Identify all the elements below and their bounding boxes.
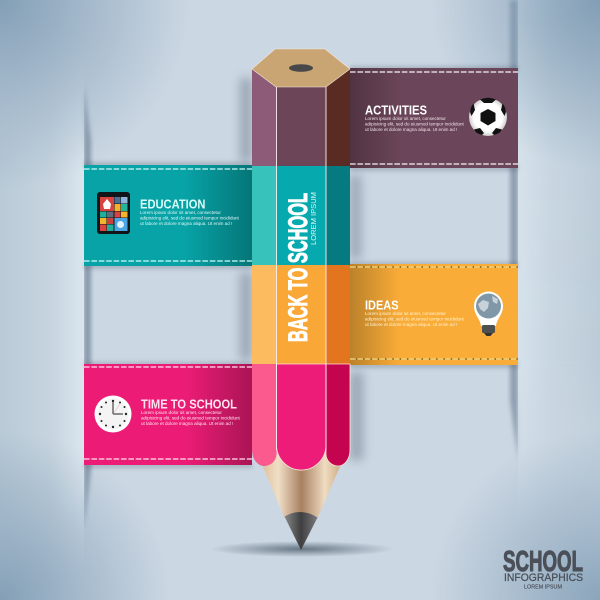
text block: activities: adipisicing elit, sed do eiusmod tempor incididunt xyxy=(365,121,465,126)
pencil xyxy=(252,49,350,550)
text block: education: ut labore et dolore magna aliqua. Ut enim ad ! xyxy=(140,221,232,226)
pencil orange section xyxy=(252,265,350,364)
text block: ideas: ut labore et dolore magna aliqua. Ut enim ad ! xyxy=(365,322,457,327)
pencil wood cone xyxy=(258,455,345,518)
heading: education: EDUCATION xyxy=(140,198,206,212)
pencil pink section xyxy=(252,364,350,470)
text block: education: Lorem ipsum dolor sit amet, consectetur xyxy=(140,210,221,215)
heading: ideas: IDEAS xyxy=(365,298,398,312)
title: back to school: BACK TO SCHOOL xyxy=(283,193,313,342)
panel: time to school ribbon xyxy=(84,364,252,465)
pencil top hexagon xyxy=(252,49,350,87)
logo: school infographics xyxy=(503,546,583,590)
panel: ideas ribbon xyxy=(350,264,518,365)
text block: activities: Lorem ipsum dolor sit amet, consectetur xyxy=(365,116,446,121)
icon: soccer ball xyxy=(469,98,507,136)
panel: activities ribbon xyxy=(350,68,518,168)
pencil purple section xyxy=(252,69,350,166)
text block: activities: ut labore et dolore magna aliqua. Ut enim ad ! xyxy=(365,127,457,132)
logo: school infographics: LOREM IPSUM xyxy=(524,584,562,590)
text block: ideas: adipisicing elit, sed do eiusmod tempor incididunt xyxy=(365,316,465,321)
text block: time to school: adipisicing elit, sed do eiusmod tempor incididunt xyxy=(141,415,241,420)
floor shadow under pencil xyxy=(210,541,394,557)
subtitle: lorem ipsum: LOREM IPSUM xyxy=(309,192,318,245)
icon: tablet xyxy=(97,192,130,234)
icon: globe light bulb xyxy=(474,292,503,336)
heading: activities: ACTIVITIES xyxy=(365,104,427,118)
heading: time to school: TIME TO SCHOOL xyxy=(141,398,237,412)
pencil cast shadow xyxy=(240,78,363,460)
pencil lead tip xyxy=(284,512,318,550)
panel: education ribbon xyxy=(84,165,252,266)
pencil top lead dot xyxy=(289,64,313,72)
icon: clock xyxy=(94,396,132,432)
text block: education: adipisicing elit, sed do eiusmod tempor incididunt xyxy=(140,215,240,220)
ribbon shadows xyxy=(84,66,518,468)
pencil teal section xyxy=(252,166,350,265)
pencil facet lines xyxy=(276,87,326,450)
text block: time to school: ut labore et dolore magna aliqua. Ut enim ad ! xyxy=(141,421,233,426)
text block: ideas: Lorem ipsum dolor sit amet, consectetur xyxy=(365,311,446,316)
logo: school infographics: INFOGRAPHICS xyxy=(504,572,583,584)
text block: time to school: Lorem ipsum dolor sit amet, consectetur xyxy=(141,410,222,415)
